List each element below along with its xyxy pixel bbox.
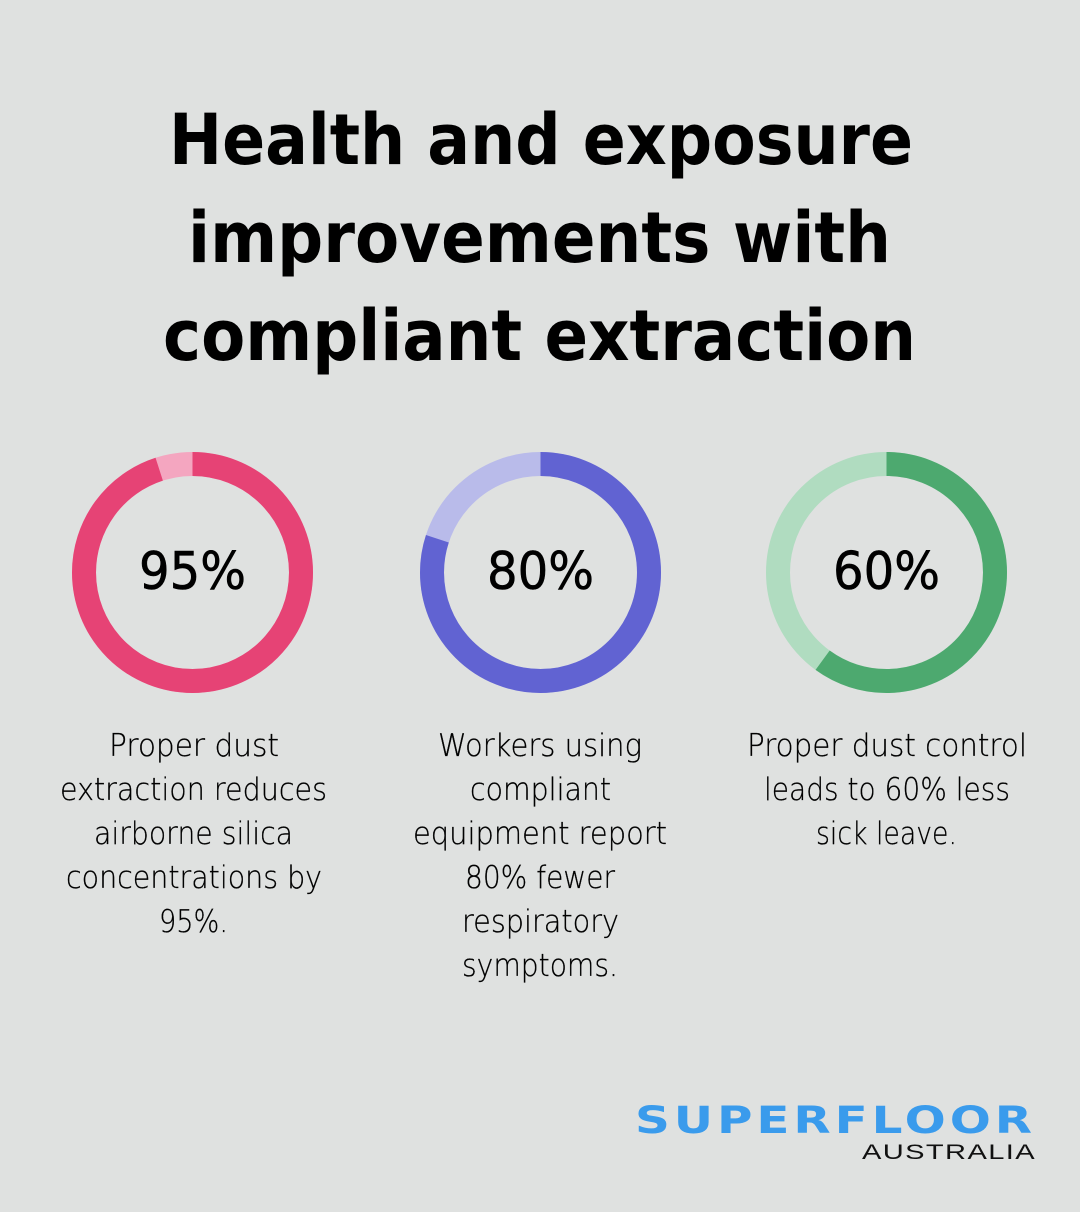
- description: silica reduction: airborne silica: [94, 816, 293, 852]
- description: respiratory symptoms: compliant: [470, 772, 611, 808]
- description: silica reduction: [60, 728, 327, 940]
- donut chart: 95%: [84, 464, 301, 681]
- title: improvements with: [188, 197, 891, 279]
- description: respiratory symptoms: respiratory: [462, 904, 619, 940]
- panel: 95% statistic: [60, 464, 327, 940]
- description: silica reduction: concentrations by: [66, 860, 322, 896]
- description: respiratory symptoms: [413, 728, 667, 984]
- logo: Superfloor Australia: AUSTRALIA: [862, 1141, 1036, 1164]
- logo: Superfloor Australia: SUPERFLOOR: [635, 1099, 1036, 1142]
- description: sick leave: sick leave.: [816, 816, 957, 852]
- description: respiratory symptoms: Workers using: [438, 728, 642, 764]
- donut chart: 80%: [432, 464, 649, 681]
- donut chart: 60%: [778, 464, 995, 681]
- description: respiratory symptoms: 80% fewer: [465, 860, 615, 896]
- title: Health and exposure: [169, 99, 913, 181]
- value: 95%: 95%: [139, 542, 246, 602]
- description: sick leave: [747, 728, 1027, 852]
- description: silica reduction: Proper dust: [109, 728, 279, 764]
- value: 80%: 80%: [487, 542, 594, 602]
- panel: 80% statistic: [413, 464, 667, 984]
- panel: 60% statistic: [747, 464, 1027, 852]
- description: sick leave: leads to 60% less: [764, 772, 1010, 808]
- logo: Superfloor Australia: [635, 1099, 1036, 1164]
- description: sick leave: Proper dust control: [747, 728, 1027, 764]
- description: respiratory symptoms: symptoms.: [462, 948, 618, 984]
- value: 60%: 60%: [833, 542, 940, 602]
- title: [163, 99, 916, 377]
- title: compliant extraction: [163, 295, 916, 377]
- description: silica reduction: extraction reduces: [60, 772, 327, 808]
- description: respiratory symptoms: equipment report: [413, 816, 667, 852]
- description: silica reduction: 95%.: [159, 904, 228, 940]
